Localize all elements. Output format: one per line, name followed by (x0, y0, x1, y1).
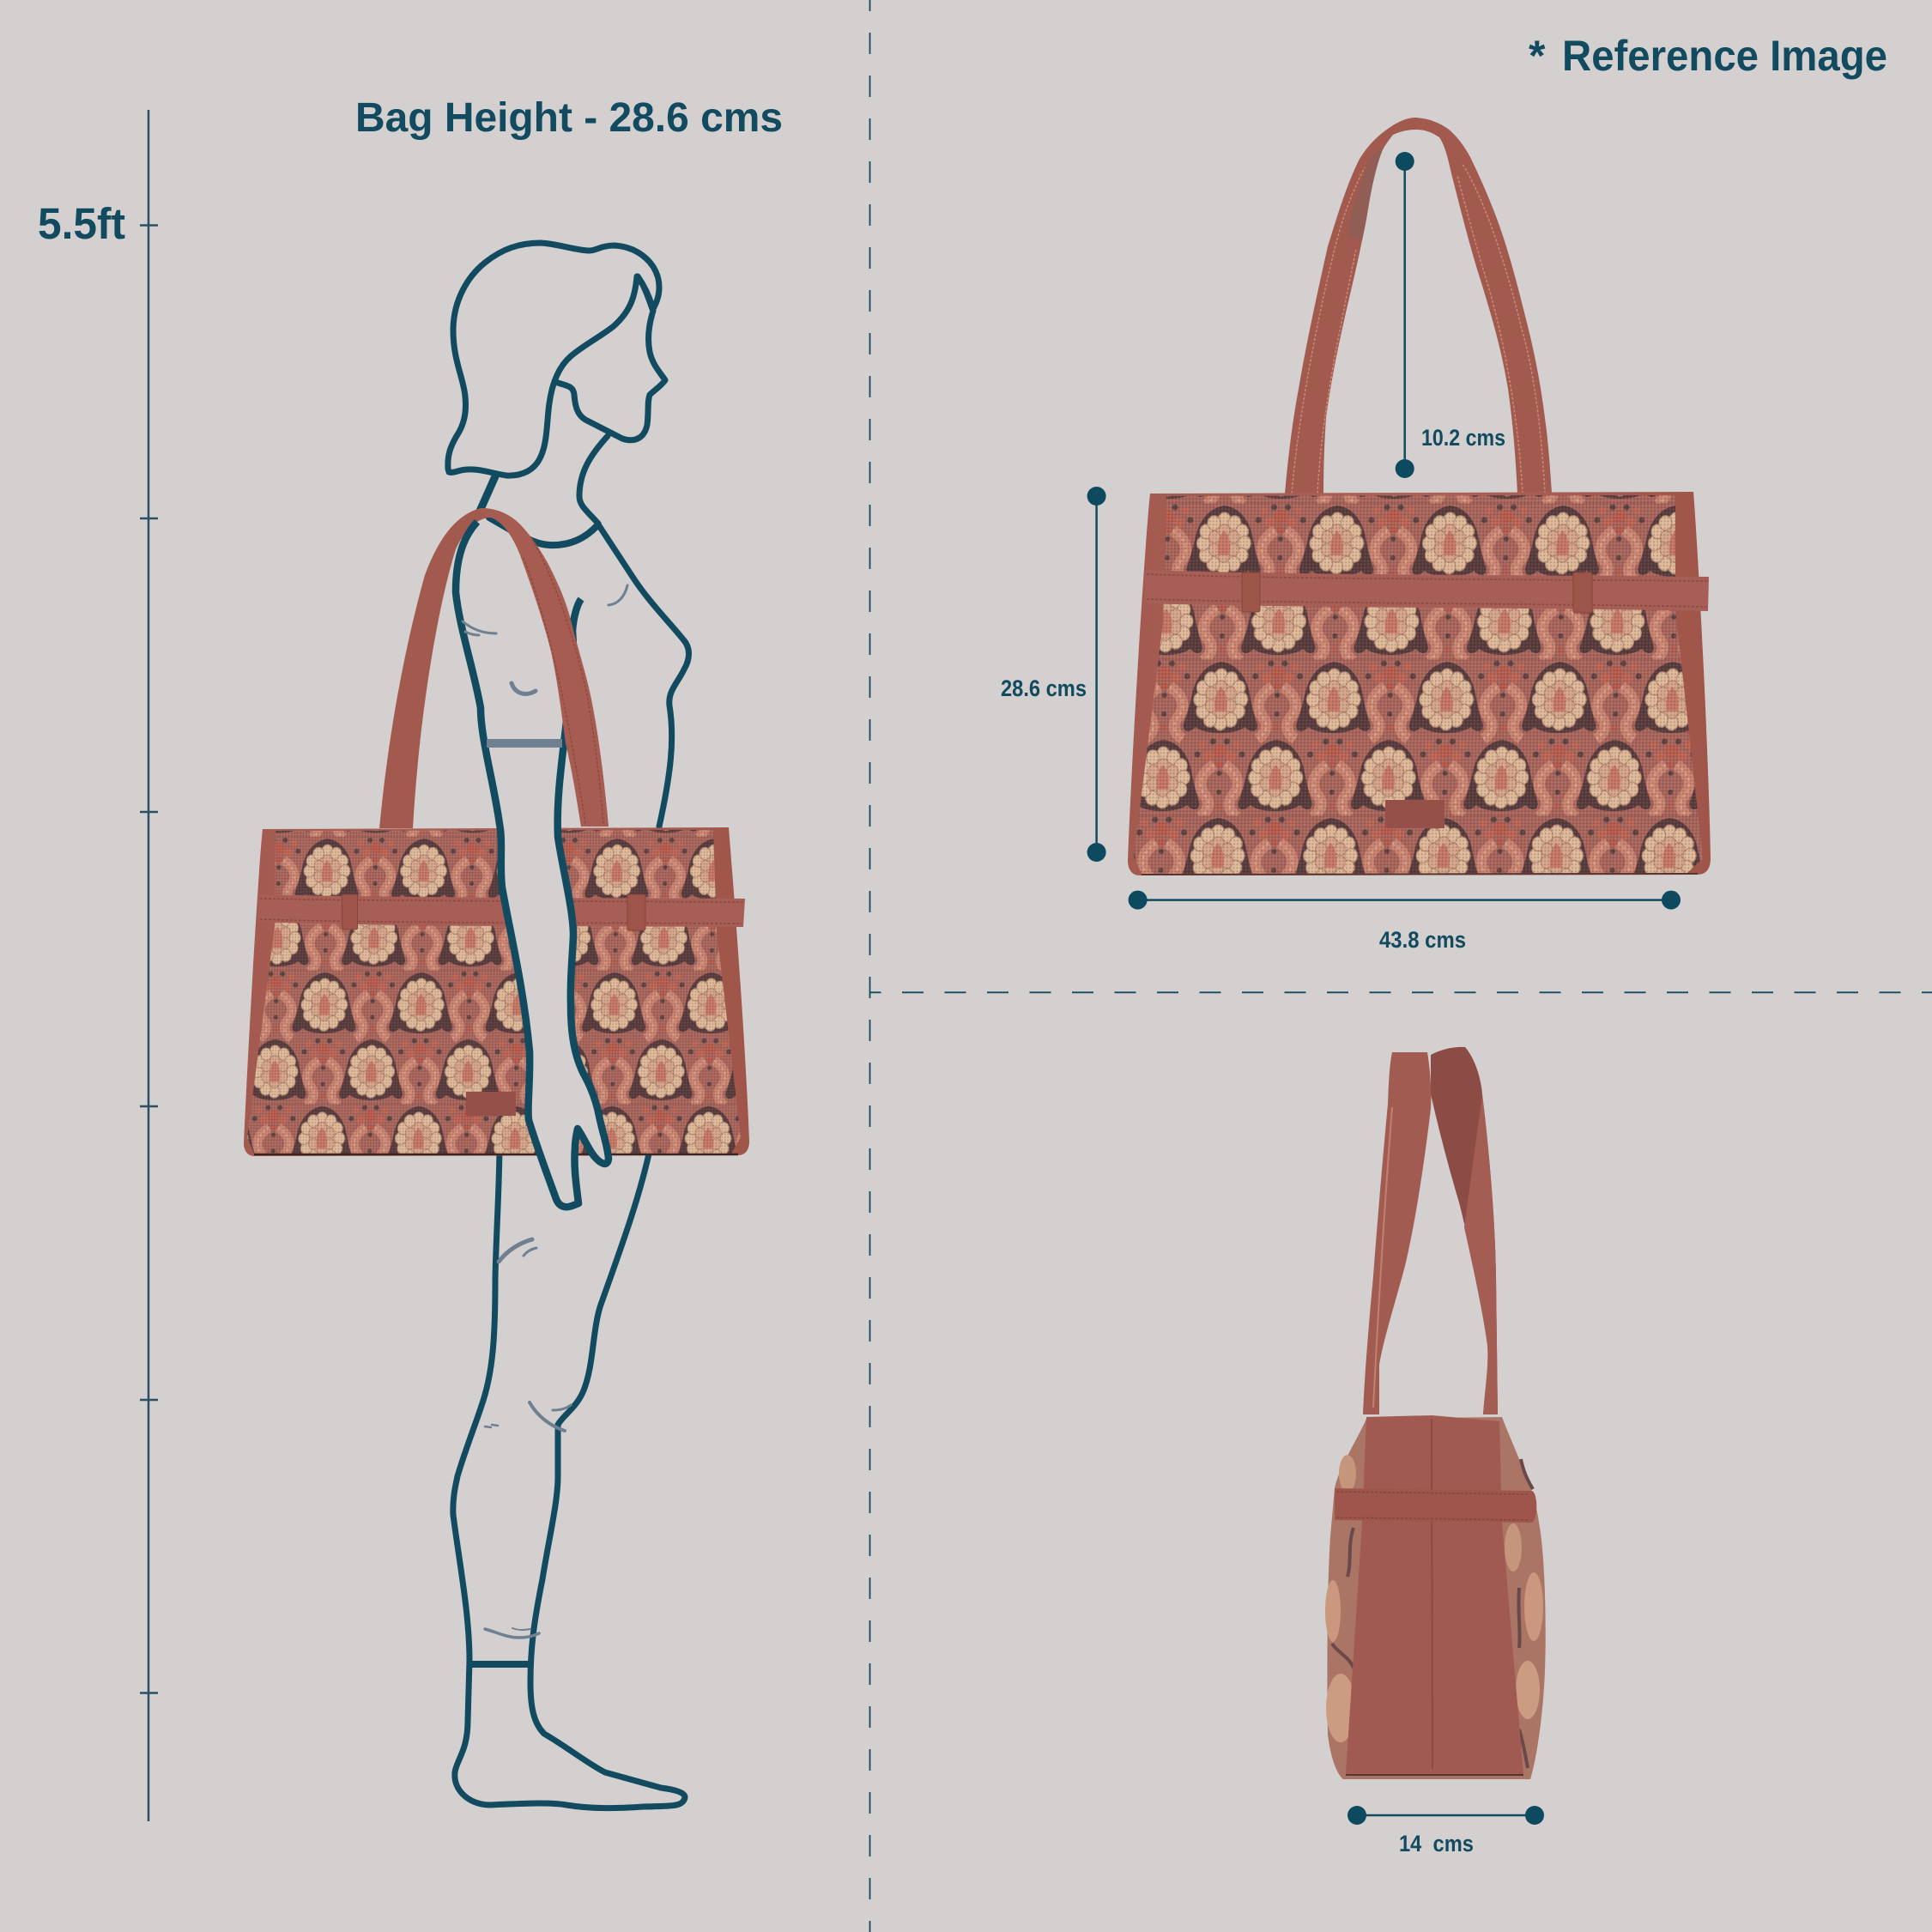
side bag handles (1363, 1047, 1498, 1414)
body contour marks (463, 585, 627, 1638)
side bag belt (1335, 1488, 1536, 1523)
ruler label: 5.5ft: 5.5ft (38, 199, 125, 248)
heading: reference image note: Reference Image (1562, 32, 1887, 80)
person figure with bag on shoulder (244, 243, 749, 1808)
dimension: bag height 28.6 cms: 28.6 cms (1001, 675, 1087, 701)
front bag patch (1385, 800, 1444, 828)
front view bag (1128, 118, 1711, 875)
bag worn on shoulder: handle (379, 508, 609, 828)
dimension: bag depth 14 cms (1348, 1806, 1544, 1856)
dimension: bag height 28.6 cms (1001, 487, 1106, 862)
side view bag (1325, 1047, 1546, 1779)
dimension: bag width 43.8 cms: 43.8 cms (1379, 927, 1466, 953)
dimension: bag depth 14 cms: 14 cms (1399, 1831, 1474, 1856)
bag handle strand over shoulder (481, 508, 609, 827)
side bag fabric (1325, 1417, 1546, 1779)
dimension: handle drop 10.2 cms: 10.2 cms (1421, 425, 1505, 451)
bag worn on shoulder: body (244, 827, 749, 1156)
heading: bag height: Bag Height - 28.6 cms (355, 95, 783, 141)
heading: reference image note: * (1529, 32, 1546, 80)
height ruler (38, 110, 158, 1821)
front bag belt (1145, 570, 1709, 613)
dimension: bag width 43.8 cms (1129, 891, 1681, 953)
figure outline: head, torso and legs (448, 243, 688, 1808)
front bag body (1128, 492, 1711, 875)
dimension: handle drop 10.2 cms (1396, 152, 1505, 478)
front bag handle (1285, 118, 1552, 494)
side bag leather panel (1346, 1415, 1523, 1775)
arm over the bag (456, 522, 609, 1207)
